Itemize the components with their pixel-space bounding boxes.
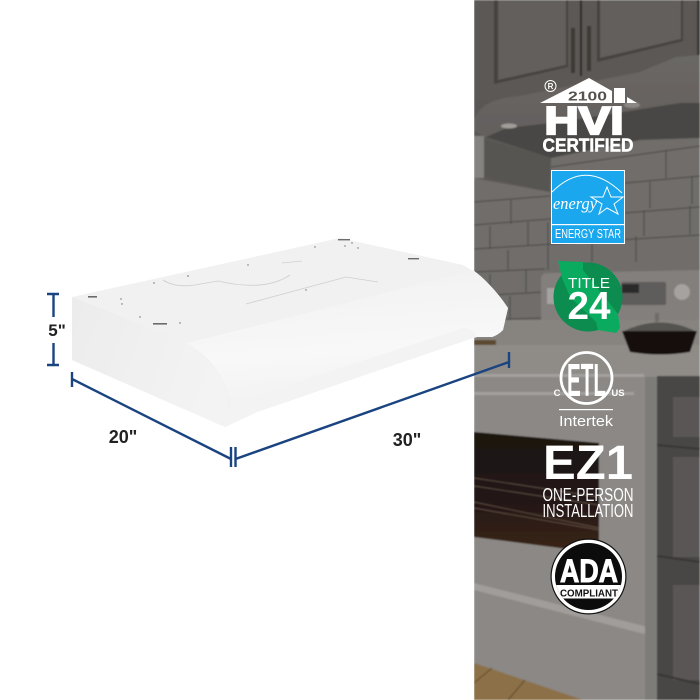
badge: ETL listed Intertek [554,352,625,430]
hood front face [187,270,508,427]
badge: HVI 2100 certified: CERTIFIED [542,136,634,156]
lower cabinets [657,376,700,700]
badge: EZ1 one-person installation [542,437,634,521]
countertop and range top [474,320,700,377]
badge: Title 24: TITLE [568,275,610,292]
dimension: width 30 inches: 30" [393,430,421,450]
subway tile backsplash [474,138,700,320]
dimension: depth 20 inches: 20" [109,427,137,447]
badge: Energy Star [552,170,624,244]
product: white range hood [72,238,508,427]
stove control panel [541,270,700,320]
panel: kitchen photo background [474,0,700,700]
badge: Energy Star: energy [553,194,597,213]
badge: Title 24 [554,261,622,333]
badge: Energy Star: ENERGY STAR [555,227,621,241]
badge: ETL listed Intertek: ETL [567,354,606,406]
badge: ADA compliant [550,538,628,614]
dimension: width 30 inches [236,352,509,467]
badge: HVI 2100 certified: HVI [544,100,624,143]
badge: ETL listed Intertek: C [554,388,561,399]
badge: ETL listed Intertek: Intertek [559,413,614,430]
dimension: depth 20 inches [72,372,231,467]
badge: Title 24: 24 [568,285,611,328]
badge: HVI 2100 certified: 2100 [568,90,607,104]
dimension: height 5 inches: 5" [48,321,66,340]
wood floor [474,663,583,700]
badge: ADA compliant: ADA [560,553,618,589]
badge: ADA compliant: COMPLIANT [560,588,618,600]
dimension: height 5 inches [47,294,66,365]
badge: EZ1 one-person installation: INSTALLATION [542,500,634,521]
range hood in photo [474,55,700,192]
oven body [474,377,657,700]
hood side face [72,297,228,427]
cabinet doors [494,0,700,84]
EZ1 logo: EZ1 [543,437,633,490]
badge: EZ1 one-person installation: ONE-PERSON [542,484,634,505]
hood lower lip [225,328,477,427]
hood top details [163,261,378,304]
badge: HVI 2100 certified [540,78,637,156]
badge: HVI 2100 certified: R [548,82,554,91]
cooking pot [622,313,697,354]
mounting holes [88,239,419,325]
badge: ETL listed Intertek: US [611,388,625,399]
